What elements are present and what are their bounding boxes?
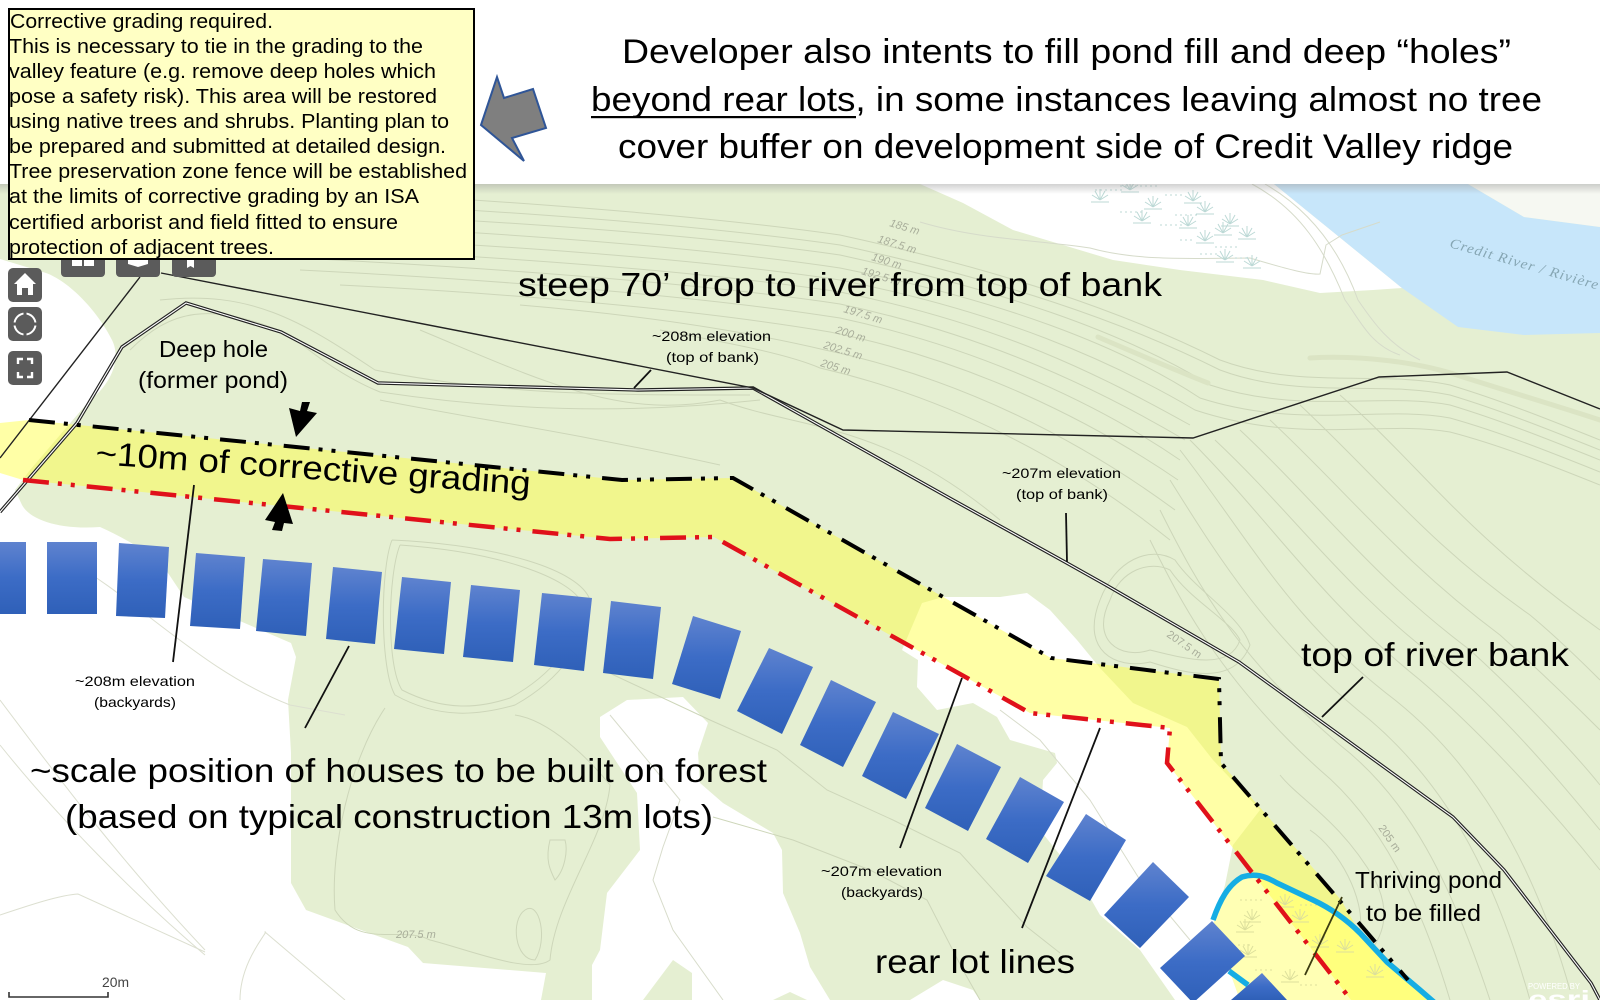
label: 10m of corrective grading: ~10m of corrective grading [95,434,532,501]
label: thriving pond [1355,867,1502,926]
red dash-dot rear lot line [23,480,1351,1000]
label: 207m elevation backyards [821,863,942,900]
contour elevation labels: 192.5 m [860,265,902,288]
heading text [591,33,1542,166]
label: steep drop: steep 70’ drop to river from top of bank [518,266,1163,303]
contour elevation labels: 185 m [888,217,921,238]
callout: corrective grading note: protection of adjacent trees. [9,237,274,259]
label: thriving pond: Thriving pond [1355,867,1502,893]
black dash-dot upper grading limit [29,420,1408,980]
thin property lines [0,273,1600,458]
esri attribution [1528,982,1590,1000]
map toolbar buttons [61,250,216,277]
label: scale position of houses: ~scale position of houses to be built on forest [30,752,767,789]
wetland marks in the pond [1236,894,1384,985]
leader lines [173,370,1363,975]
label: deep hole: (former pond) [138,367,288,393]
label: deep hole: Deep hole [159,336,268,362]
river label: Credit River / Rivière [1448,236,1600,294]
contour elevation labels: 190 m [870,251,903,272]
arrow: up to rear lot line [265,493,293,531]
callout: corrective grading note: Corrective grading required. [10,11,273,33]
white header band [0,0,1600,184]
map top shadow [0,184,1600,194]
callout: corrective grading note: This is necessary to tie in the grading to the [9,36,423,58]
underline: beyond rear lots [591,116,856,118]
heading text: beyond rear lots, in some instances leaving almost no tree [591,81,1542,119]
contour elevation labels: 205 m [1376,823,1403,855]
heading text: cover buffer on development side of Credit Valley ridge [618,128,1513,166]
esri attribution: POWERED BY [1528,982,1581,991]
label: 208m elevation backyards [75,673,195,710]
heading text: Developer also intents to fill pond fill and deep “holes” [622,33,1511,71]
white land: clearing behind grading band [902,593,1260,1000]
blue pond outline [1213,875,1435,1000]
label: 208m elevation top of bank: ~208m elevation [652,328,771,344]
label: top of river bank: top of river bank [1301,636,1570,673]
white land: centre [592,697,830,1000]
callout: corrective grading note: valley feature (e.g. remove deep holes which [9,61,436,83]
contour elevation labels: 200 m [833,324,867,345]
label: rear lot lines: rear lot lines [875,943,1075,980]
label: 208m elevation backyards: (backyards) [94,694,176,710]
callout: corrective grading note: pose a safety risk). This area will be restored [9,86,437,108]
contour elevation labels: 205 m [818,357,852,378]
callout: corrective grading note: using native trees and shrubs. Planting plan to [9,111,449,133]
scale bar: 20m [102,974,129,990]
callout: corrective grading note: be prepared and submitted at detailed design. [9,136,446,158]
arrow: grey pointing to callout [481,77,546,161]
icon: locate button [8,307,42,341]
white corner beyond the river [1468,184,1600,227]
marsh symbols north of the river [1091,179,1261,268]
label: 208m elevation top of bank: (top of bank) [666,349,759,365]
label: scale position of houses [30,752,767,835]
river [1274,184,1600,335]
white land: north of river bank [920,184,1402,293]
label: 207m elevation backyards: (backyards) [841,884,923,900]
label: 207m elevation backyards: ~207m elevation [821,863,942,879]
label: scale position of houses: (based on typical construction 13m lots) [65,798,713,835]
label: 208m elevation backyards: ~208m elevation [75,673,195,689]
houses row [0,542,1287,1000]
label: thriving pond: to be filled [1366,900,1481,926]
label: 207m elevation top of bank: (top of bank) [1016,486,1108,502]
steep slope darker contour band [1098,337,1600,420]
top of bank double line [0,303,1600,1000]
callout: corrective grading note [9,9,474,259]
contour elevation labels: 187.5 m [876,233,918,256]
pond interior with wetland [1213,875,1435,1000]
label: 208m elevation top of bank [652,328,771,365]
label: deep hole [138,336,288,393]
callout: corrective grading note: certified arborist and field fitted to ensure [9,212,398,234]
white land: small patch [910,980,980,1000]
callout: corrective grading note: Tree preservation zone fence will be established [9,161,467,183]
contour elevation labels [395,217,1403,941]
contour elevation labels: 207.5 m [395,929,436,941]
yellow corrective grading band [0,420,1435,1000]
arrow: down to grading limit [289,402,317,437]
icon: fullscreen button [8,351,42,385]
label: 207m elevation top of bank [1002,465,1121,502]
label: 207m elevation top of bank: ~207m elevation [1002,465,1121,481]
white land: left side [0,259,546,1000]
callout: corrective grading note: at the limits of corrective grading by an ISA [9,186,420,208]
contour elevation labels: 202.5 m [821,339,864,362]
icon: home button [8,268,42,302]
scale bar [9,974,129,997]
contour elevation labels: 207.5 m [1164,629,1204,661]
contour elevation labels: 197.5 m [842,303,884,326]
